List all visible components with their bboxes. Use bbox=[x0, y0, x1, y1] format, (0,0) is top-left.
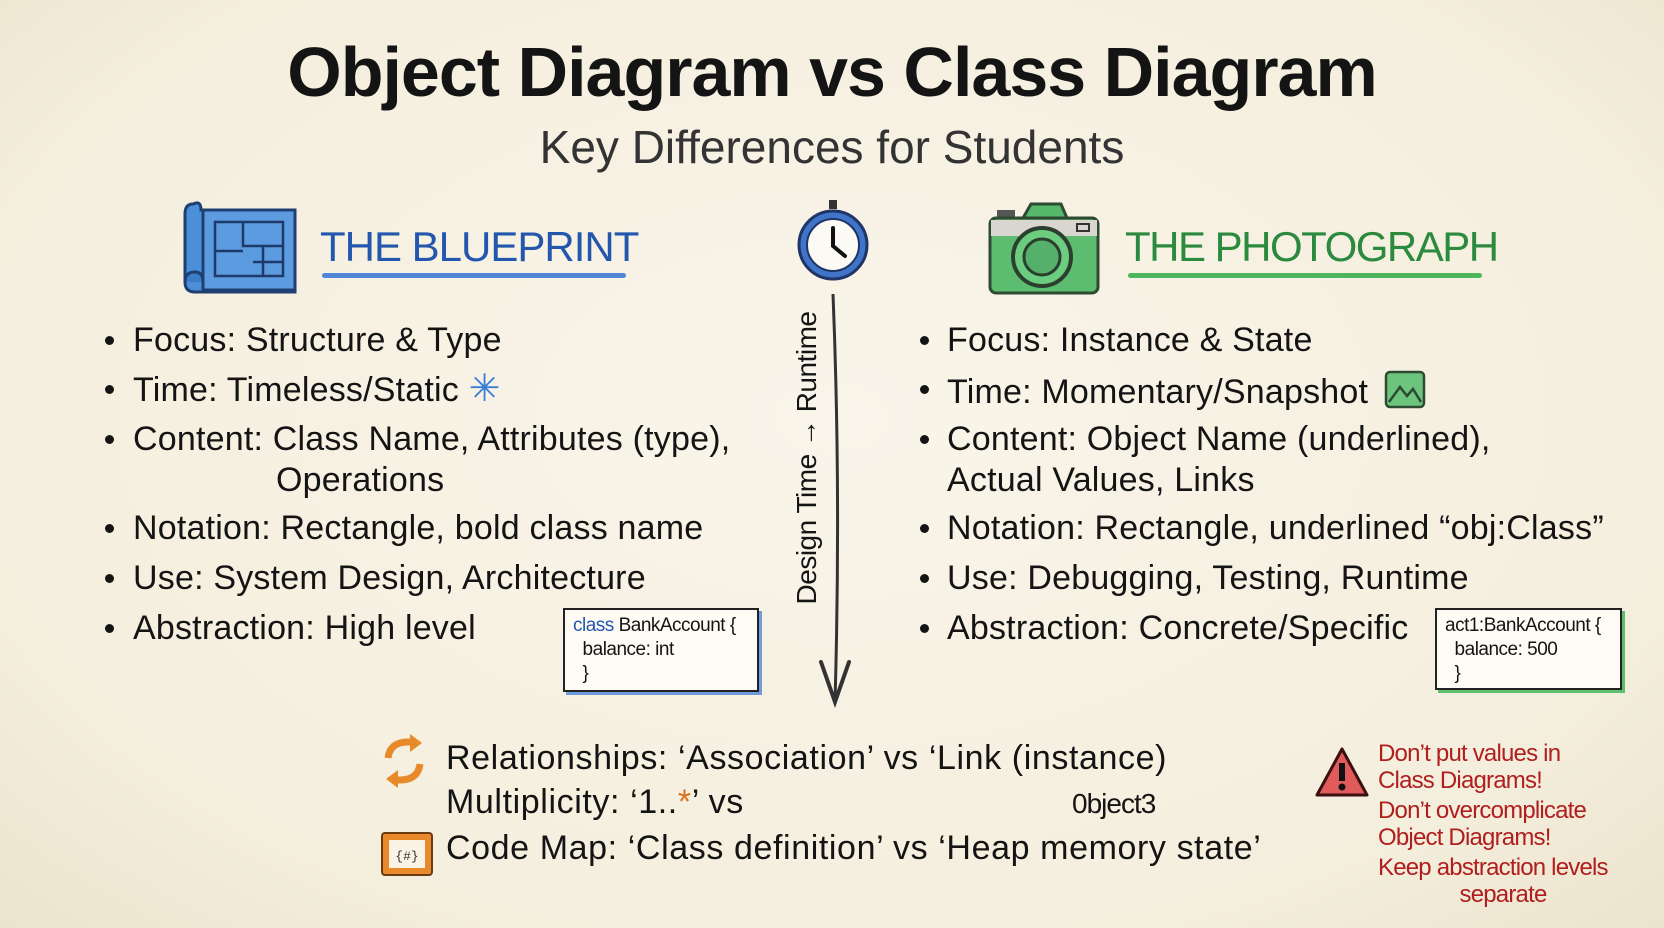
panel: object diagram bullets bbox=[920, 321, 1604, 647]
bullet use bbox=[105, 559, 646, 597]
code box: object: act1:BankAccount { bbox=[1445, 615, 1601, 636]
code box: class: balance: int bbox=[583, 639, 674, 660]
callout: warnings: separate bbox=[1460, 881, 1546, 908]
panel: class diagram bullets: Time: Timeless/Static ✳ bbox=[133, 368, 501, 410]
callout: warnings: Class Diagrams! bbox=[1378, 767, 1542, 794]
panel: object diagram bullets: Time: Momentary/Snapshot bbox=[947, 373, 1368, 411]
bottom comparison text bbox=[446, 739, 1261, 867]
panel: class diagram bullets: Content: Class Name, Attributes (type), bbox=[133, 420, 730, 458]
panel: object diagram bullets: Use: Debugging, Testing, Runtime bbox=[947, 559, 1469, 597]
code box: class bbox=[563, 608, 759, 692]
callout: warnings: Object Diagrams! bbox=[1378, 824, 1551, 851]
panel: object diagram bullets: Notation: Rectangle, underlined “obj:Class” bbox=[947, 509, 1604, 547]
panel: class diagram bullets: Abstraction: High level bbox=[133, 609, 476, 647]
callout: warnings: Don’t put values in bbox=[1378, 740, 1560, 767]
bottom comparison text: Code Map: ‘Class definition’ vs ‘Heap memory state’ bbox=[446, 829, 1261, 867]
bullet focus bbox=[105, 321, 502, 359]
callout: warnings: Don’t overcomplicate bbox=[1378, 797, 1586, 824]
bottom comparison text: Multiplicity: ‘1..*’ vs bbox=[446, 783, 744, 821]
icon: warning bbox=[1316, 747, 1369, 796]
panel: class diagram bullets: Notation: Rectangle, bold class name bbox=[133, 509, 703, 547]
title: Object Diagram vs Class Diagram bbox=[287, 33, 1377, 111]
bullet content bbox=[920, 420, 1491, 499]
panel: class diagram bullets: Use: System Design, Architecture bbox=[133, 559, 646, 597]
icon: blueprint bbox=[184, 201, 296, 294]
panel: object diagram bullets: Focus: Instance & State bbox=[947, 321, 1313, 359]
vertical label: Design Time → Runtime bbox=[791, 312, 822, 604]
code box: class: class BankAccount { bbox=[573, 615, 736, 636]
heading: the blueprint: THE BLUEPRINT bbox=[320, 223, 638, 270]
bullet notation bbox=[105, 509, 703, 547]
icon: clock bbox=[798, 200, 868, 280]
subtitle: Key Differences for Students bbox=[540, 121, 1124, 173]
arrow: design time to runtime bbox=[818, 294, 852, 708]
icon: cycle arrows bbox=[384, 734, 424, 788]
code box: object bbox=[1435, 608, 1622, 690]
icon: camera bbox=[988, 202, 1100, 294]
icon: code map bbox=[381, 832, 433, 876]
bullet abstraction bbox=[105, 609, 476, 647]
icon: code map: {#} bbox=[395, 849, 419, 864]
panel: class diagram bullets: Focus: Structure & Type bbox=[133, 321, 502, 359]
panel: object diagram bullets: Content: Object Name (underlined), bbox=[947, 420, 1491, 458]
code box: class: } bbox=[583, 663, 588, 684]
panel: class diagram bullets bbox=[105, 321, 730, 647]
bullet focus bbox=[920, 321, 1313, 359]
bottom comparison text: Relationships: ‘Association’ vs ‘Link (instance) bbox=[446, 739, 1167, 777]
bullet notation bbox=[920, 509, 1604, 547]
icon: picture bbox=[1384, 370, 1426, 408]
bottom comparison text: 0bject3 bbox=[1072, 788, 1155, 819]
panel: object diagram bullets: Abstraction: Concrete/Specific bbox=[947, 609, 1408, 647]
bullet time bbox=[105, 368, 501, 410]
panel: object diagram bullets: Actual Values, Links bbox=[947, 461, 1255, 499]
bullet abstraction bbox=[920, 609, 1408, 647]
code box: object: } bbox=[1455, 663, 1460, 684]
panel: class diagram bullets: Operations bbox=[276, 461, 444, 499]
bullet content bbox=[105, 420, 730, 499]
code box: object: balance: 500 bbox=[1455, 639, 1557, 660]
callout: warnings bbox=[1378, 740, 1608, 908]
bullet use bbox=[920, 559, 1469, 597]
callout: warnings: Keep abstraction levels bbox=[1378, 854, 1608, 881]
bullet time bbox=[920, 370, 1426, 411]
heading: the photograph: THE PHOTOGRAPH bbox=[1125, 223, 1498, 270]
